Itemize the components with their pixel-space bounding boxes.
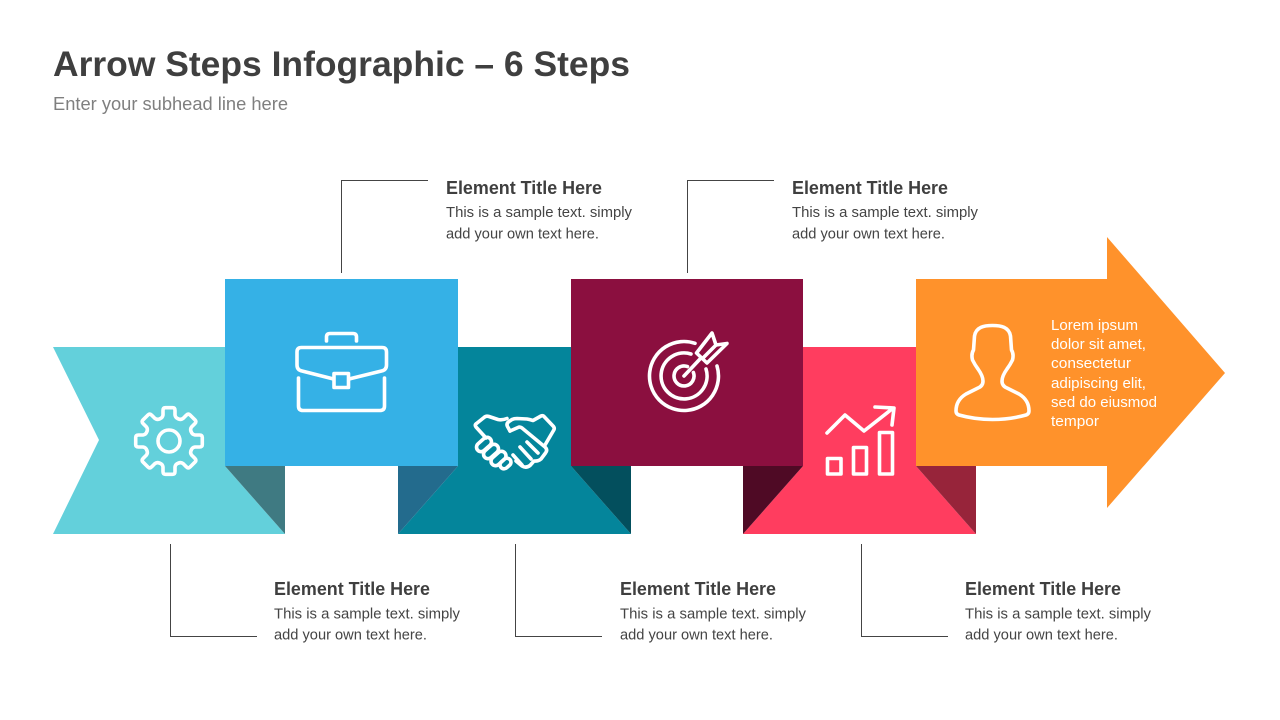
icon: handshake — [475, 416, 554, 470]
icon: target — [649, 333, 727, 410]
callout: step 2: This is a sample text. simply — [446, 205, 633, 221]
step 3: dark teal ribbon — [398, 347, 631, 534]
callout: step 4 — [688, 178, 979, 273]
step 6 text — [1051, 318, 1157, 430]
callout: step 3: add your own text here. — [620, 628, 773, 644]
callout: step 2: add your own text here. — [446, 226, 599, 242]
step 6 text: dolor sit amet, — [1051, 337, 1146, 353]
step 6 text: tempor — [1051, 414, 1099, 430]
icon: growth chart — [827, 407, 894, 474]
callout: step 1 — [170, 544, 461, 644]
icon: gear — [136, 408, 202, 474]
callout: step 5 — [862, 544, 1152, 644]
callout: step 4: add your own text here. — [792, 226, 945, 242]
callout: step 4: This is a sample text. simply — [792, 205, 979, 221]
title: Arrow Steps Infographic – 6 Steps — [53, 45, 630, 84]
step 2: blue panel — [225, 279, 458, 466]
callout: step 1: This is a sample text. simply — [274, 606, 461, 622]
step 6 text: adipiscing elit, — [1051, 376, 1146, 392]
step 4: maroon panel — [571, 279, 803, 466]
callout: step 3: This is a sample text. simply — [620, 606, 807, 622]
step 1: light teal ribbon — [53, 347, 285, 534]
callout: step 3: Element Title Here — [620, 579, 776, 599]
icon: briefcase — [297, 334, 386, 410]
step 6: orange arrow — [916, 237, 1225, 508]
callout: step 5: Element Title Here — [965, 579, 1121, 599]
step 6 text: consectetur — [1051, 356, 1131, 372]
icon: person — [956, 326, 1029, 420]
callout: step 3 — [516, 544, 807, 644]
callout: step 5: add your own text here. — [965, 628, 1118, 644]
callout: step 4: Element Title Here — [792, 178, 948, 198]
callout: step 1: add your own text here. — [274, 628, 427, 644]
step 5: coral ribbon — [743, 347, 976, 534]
step 6 text: Lorem ipsum — [1051, 318, 1138, 334]
callout: step 1: Element Title Here — [274, 579, 430, 599]
callout: step 2 — [342, 178, 633, 273]
callout: step 2: Element Title Here — [446, 178, 602, 198]
subhead: Enter your subhead line here — [53, 93, 288, 114]
step 6 text: sed do eiusmod — [1051, 395, 1157, 411]
callout: step 5: This is a sample text. simply — [965, 606, 1152, 622]
